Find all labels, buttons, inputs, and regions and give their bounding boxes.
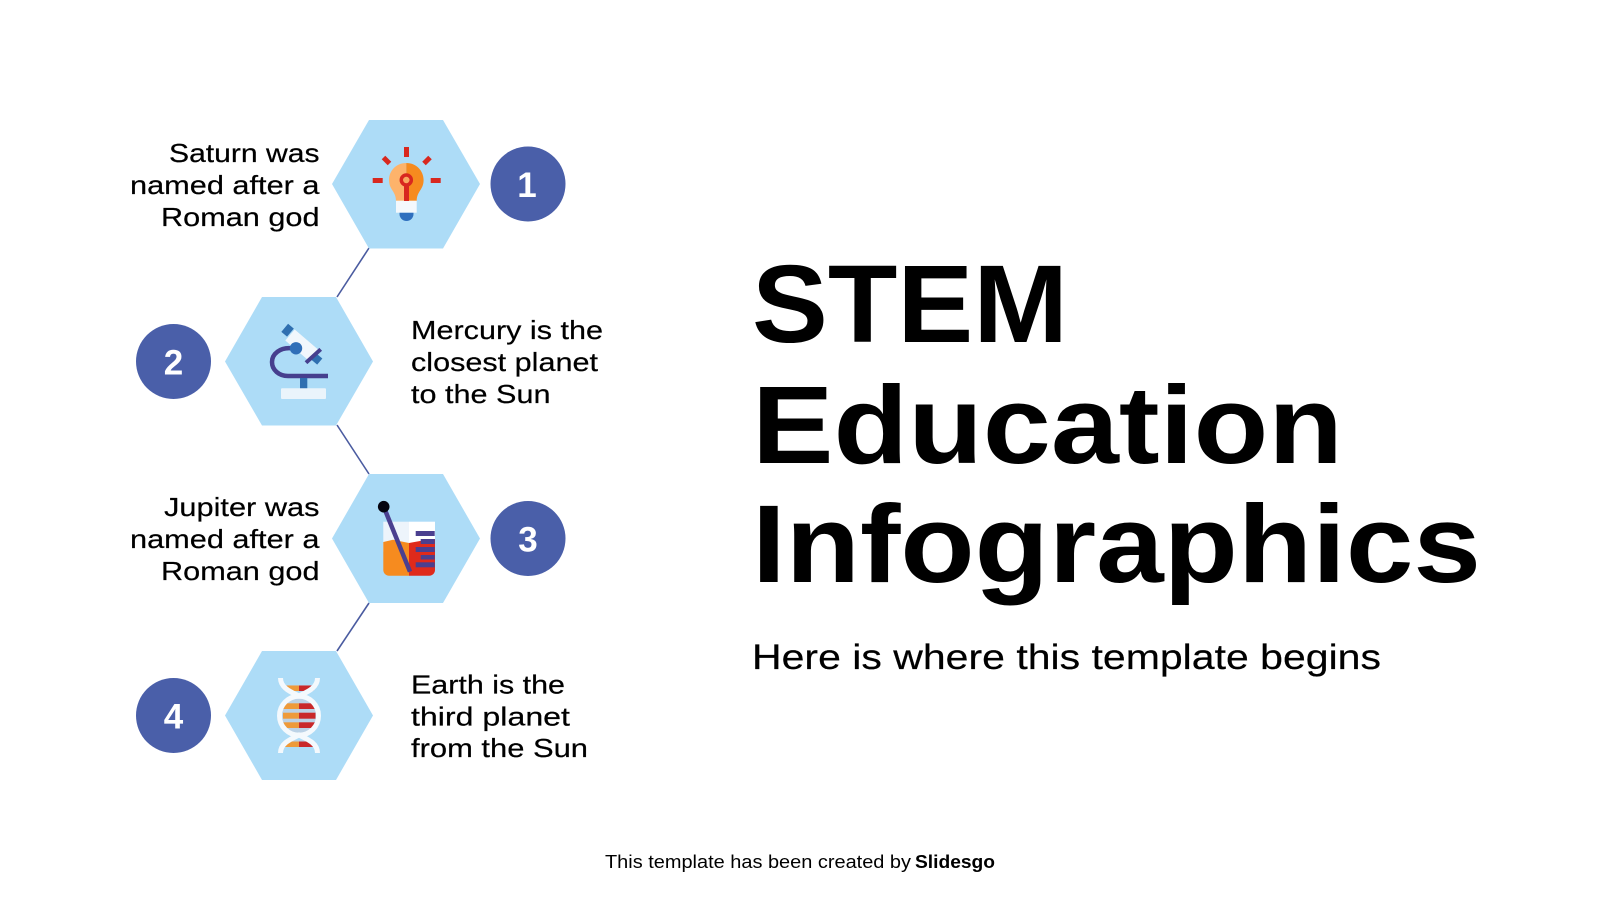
step 4 hexagon xyxy=(225,651,373,780)
text: Saturn: named after a xyxy=(130,170,320,200)
title xyxy=(752,243,1481,606)
title: STEM xyxy=(752,243,1068,366)
text: Mercury: to the Sun xyxy=(411,379,550,409)
icon: microscope xyxy=(272,324,328,399)
number badge 3: 3 xyxy=(518,520,538,560)
text: Jupiter: named after a xyxy=(130,524,320,554)
text: Saturn: Roman god xyxy=(161,202,320,232)
footer credit: Slidesgo xyxy=(915,852,995,872)
number badge 1 xyxy=(490,146,566,222)
number badge 2: 2 xyxy=(164,344,183,382)
step 1 hexagon xyxy=(332,120,480,248)
text: Earth: from the Sun xyxy=(411,733,588,763)
number badge 3 xyxy=(490,501,566,576)
number badge 1: 1 xyxy=(517,166,537,205)
title: Infographics xyxy=(752,483,1481,606)
step 1: Saturn xyxy=(130,120,566,248)
step 2: Mercury xyxy=(136,297,603,426)
subtitle: Here is where this template begins xyxy=(752,637,1381,677)
text: Earth: third planet xyxy=(411,702,571,732)
title: Education xyxy=(752,364,1343,487)
connector line: step 1 to step 2 xyxy=(337,248,369,297)
text: Saturn: Saturn was xyxy=(169,138,320,168)
text: Jupiter: Roman god xyxy=(161,556,320,586)
text: Jupiter xyxy=(130,492,320,586)
text: Mercury: closest planet xyxy=(411,347,599,377)
icon: DNA helix xyxy=(280,678,318,753)
connector line: step 3 to step 4 xyxy=(337,603,369,651)
icon: beaker xyxy=(378,501,435,576)
text: Earth: Earth is the xyxy=(411,670,565,700)
step 2 hexagon xyxy=(225,297,373,426)
number badge 2 xyxy=(136,324,211,399)
step 3 hexagon xyxy=(332,474,480,603)
text: Mercury: Mercury is the xyxy=(411,315,603,345)
text: Saturn xyxy=(130,138,320,232)
step 4: Earth xyxy=(136,651,588,780)
text: Mercury xyxy=(411,315,603,409)
icon: light bulb xyxy=(373,147,441,221)
text: Jupiter: Jupiter was xyxy=(164,492,320,522)
number badge 4 xyxy=(136,678,211,753)
footer credit: This template has been created by xyxy=(605,852,911,872)
text: Earth xyxy=(411,670,588,763)
connector line: step 2 to step 3 xyxy=(337,425,369,474)
number badge 4: 4 xyxy=(164,698,184,736)
step 3: Jupiter xyxy=(130,474,566,603)
